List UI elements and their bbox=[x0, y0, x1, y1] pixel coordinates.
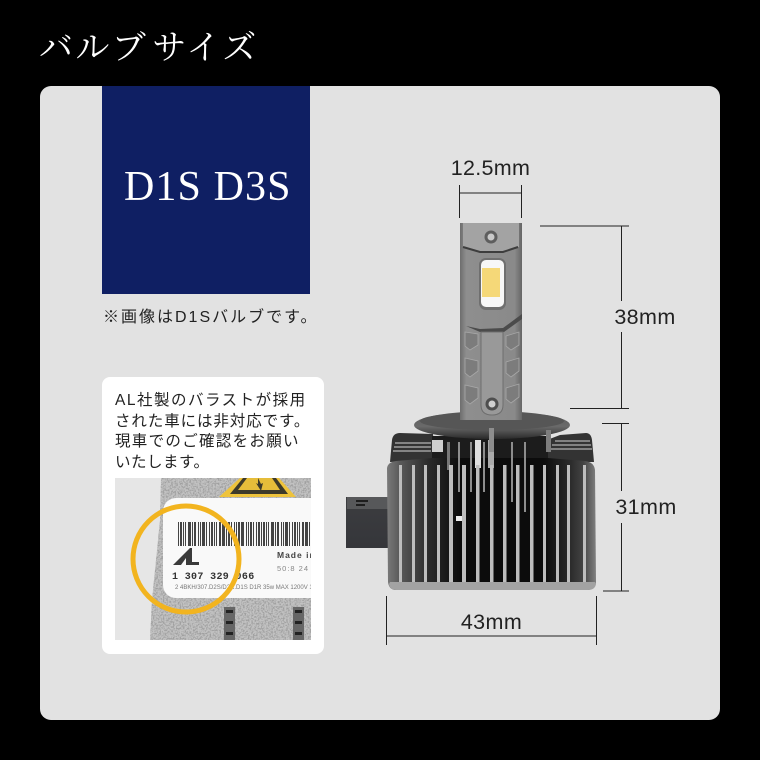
barcode bbox=[178, 522, 311, 546]
dimension: width 12.5mm bbox=[451, 156, 530, 218]
top screw bbox=[484, 230, 498, 244]
warning text: いたします。 bbox=[115, 453, 209, 471]
top cap bbox=[463, 223, 519, 252]
warning text: 現車でのご確認をお願い bbox=[115, 432, 300, 450]
side scallops bbox=[465, 332, 519, 404]
LED chip bbox=[479, 258, 506, 310]
dimension: width 43mm: 43mm bbox=[461, 610, 522, 634]
ballast label photo: 2 4BKH/307.D2S/D2R.D1S D1R 35w MAX 1200V 1 bbox=[175, 585, 313, 591]
cooling fins bbox=[399, 465, 586, 582]
connector pins bbox=[224, 607, 304, 640]
ballast housing bbox=[387, 458, 596, 590]
ballast label photo: 50:8 24 bbox=[277, 564, 309, 573]
lower chamfer bbox=[466, 314, 522, 332]
image note: ※画像はD1Sバルブです。 bbox=[103, 307, 319, 326]
warning text: AL社製のバラストが採用 bbox=[115, 391, 307, 409]
bottom screw bbox=[486, 398, 498, 410]
dimension: height 31mm bbox=[602, 423, 677, 591]
dimension: height 38mm: 38mm bbox=[614, 305, 676, 329]
central rail bbox=[481, 332, 503, 415]
white sticker bbox=[163, 498, 311, 598]
bulb flange bbox=[414, 411, 570, 452]
rear fins bbox=[432, 440, 526, 512]
callout: AL ballast warning bbox=[102, 377, 333, 654]
dimension: width 12.5mm: 12.5mm bbox=[451, 156, 530, 180]
dimension: height 38mm bbox=[540, 226, 676, 408]
ballast shoulders bbox=[390, 433, 594, 462]
warning text: された車には非対応です。 bbox=[115, 412, 310, 430]
warning triangle bbox=[219, 478, 296, 497]
title: バルブサイズ bbox=[39, 30, 259, 67]
bright spot bbox=[456, 516, 462, 521]
panel: bulb size bbox=[40, 86, 720, 720]
ballast label photo: Made in bbox=[277, 550, 316, 560]
AL logo bbox=[173, 548, 199, 565]
bulb illustration bbox=[346, 223, 596, 590]
ballast centre behind flange bbox=[432, 436, 548, 466]
dimension: width 43mm bbox=[386, 596, 596, 645]
dimension: height 31mm: 31mm bbox=[615, 495, 677, 519]
ballast label photo bbox=[115, 478, 311, 640]
bulb type badge: D1S D3S bbox=[124, 164, 292, 210]
part number: 1 307 329 066 bbox=[172, 572, 255, 583]
ballast connector bbox=[346, 497, 388, 548]
bulb head bbox=[460, 223, 522, 420]
highlight circle bbox=[133, 506, 239, 612]
bulb type badge bbox=[102, 86, 310, 294]
ballast base strip bbox=[389, 582, 596, 590]
